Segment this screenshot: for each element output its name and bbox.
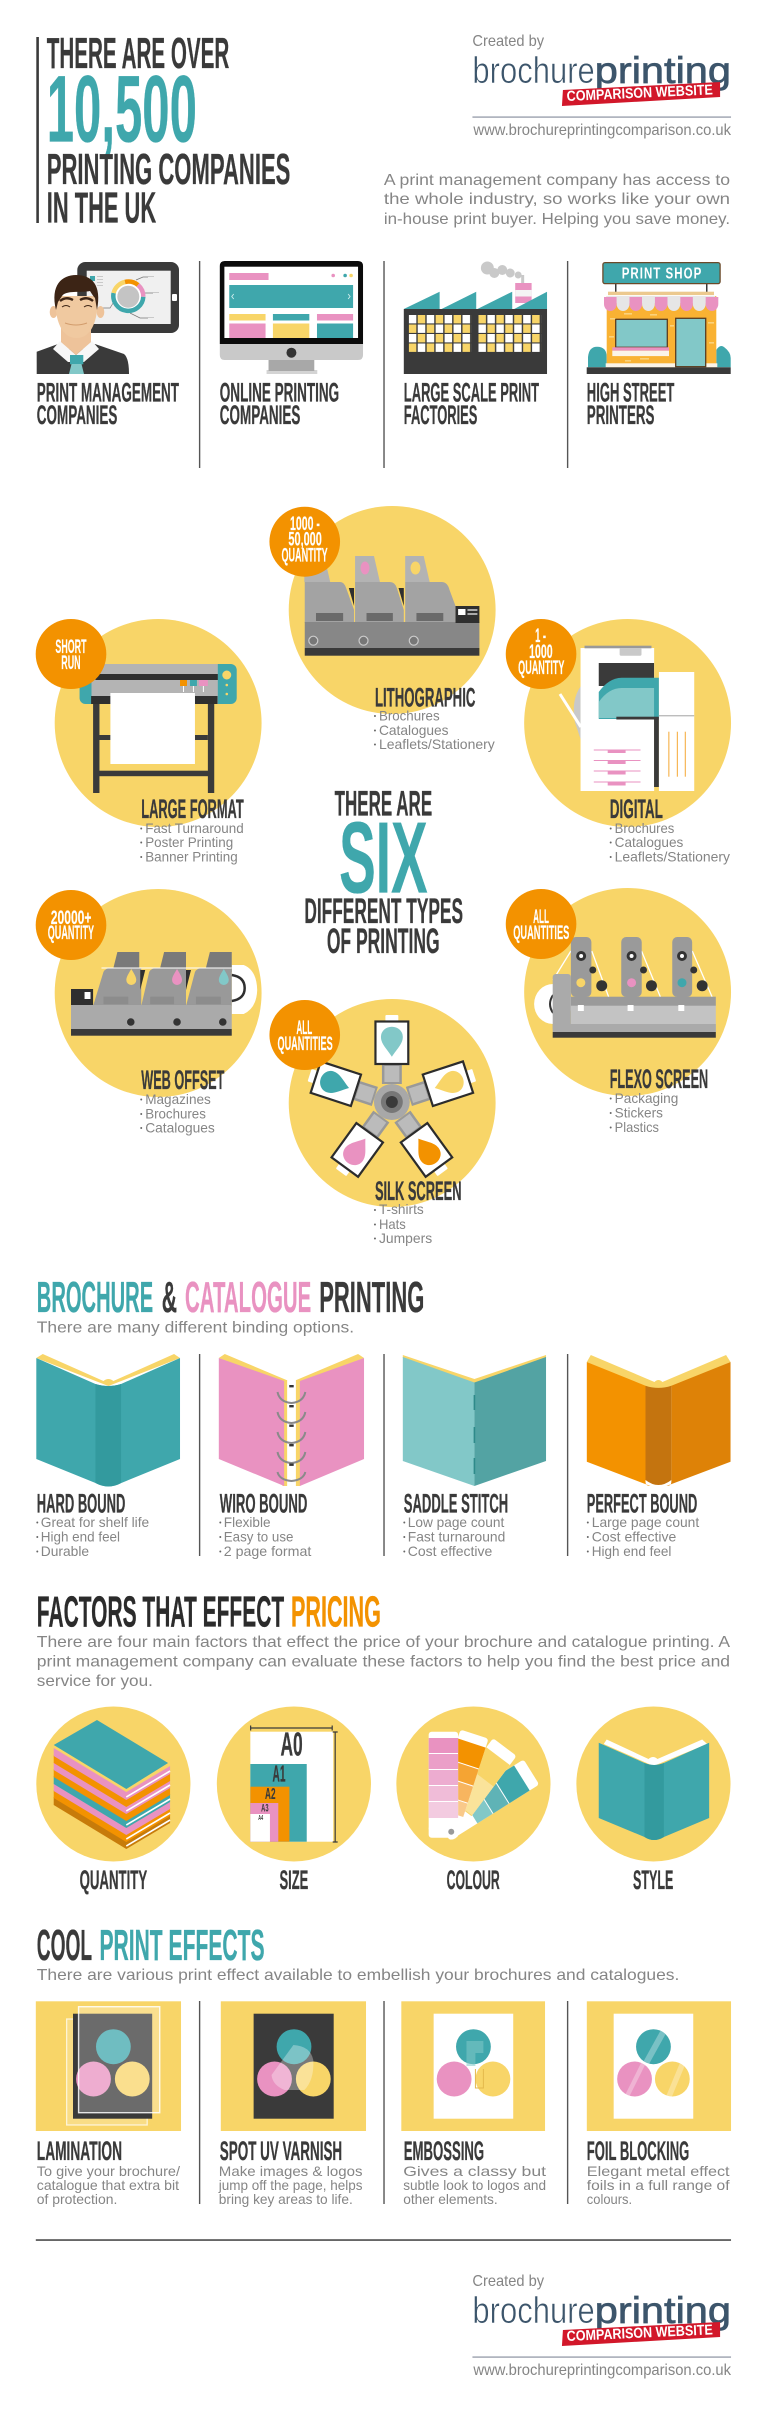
label and text	[37, 2136, 180, 2207]
panel: print management companies	[37, 262, 179, 430]
label and text	[403, 2136, 546, 2207]
panel: spot uv varnish	[218, 2001, 366, 2207]
icon: man with tablet	[37, 262, 179, 374]
label and list	[403, 1489, 508, 1559]
header: vertical rule and headline: THERE ARE OVER	[47, 30, 229, 78]
label and text: Make images & logos	[219, 2163, 363, 2179]
heading: PRINTERS	[587, 400, 654, 430]
label and text	[587, 2136, 730, 2207]
label and list: Stickers	[615, 1105, 663, 1121]
run-length badge: SHORT	[55, 637, 87, 658]
label and text: subtle look to logos and	[403, 2177, 546, 2193]
logo: footer: www.brochureprintingcomparison.co.uk	[472, 2362, 731, 2379]
panel: colour	[396, 1706, 551, 1895]
heading	[404, 377, 539, 430]
label and list: Packaging	[615, 1090, 678, 1106]
label and list: Jumpers	[379, 1230, 432, 1246]
label and list	[219, 1489, 311, 1559]
panel: online printing companies	[220, 261, 363, 430]
label and list: Banner Printing	[145, 849, 238, 865]
label and list	[587, 1489, 699, 1559]
heading	[220, 377, 339, 430]
logo: footer: brochure	[472, 2290, 595, 2331]
label and list: Catalogues	[145, 1120, 215, 1136]
quantity badge: 1000 -	[290, 514, 320, 535]
heading: ONLINE PRINTING	[220, 377, 339, 408]
icon: spot uv sheet	[221, 2001, 366, 2131]
subheading: print effects intro: There are various print effect available to embellish your brochures and catalogues.	[37, 1967, 679, 1984]
quantity badge: 1 -	[535, 626, 546, 647]
label and list: Catalogues	[615, 834, 683, 850]
heading: brochure and catalogue printing: BROCHURE	[37, 1274, 153, 1322]
icon: desktop monitor	[220, 261, 363, 374]
label and list: Plastics	[615, 1119, 659, 1135]
label and text: foils in a full range of	[587, 2177, 730, 2193]
intro paragraph: A print management company has access to	[384, 172, 730, 189]
header: vertical rule and headline: 10,500	[47, 56, 197, 163]
icon: stack of books	[54, 1720, 170, 1849]
label and list: Durable	[41, 1543, 89, 1559]
icon: lithographic press	[304, 556, 479, 656]
heading: FACTORIES	[404, 400, 477, 430]
label and text: bring key areas to life.	[219, 2191, 353, 2207]
label and list: Leaflets/Stationery	[615, 849, 730, 865]
icon: colour swatch fan	[428, 1730, 539, 1841]
icon: foil sheet	[587, 2001, 731, 2131]
panel: lamination	[36, 2001, 181, 2207]
icon: perfect bound book	[587, 1355, 731, 1486]
label and text: jump off the page, helps	[218, 2177, 363, 2193]
panel: saddle stitch: SADDLE STITCH	[404, 1489, 508, 1519]
logo: footer: printing	[595, 2290, 731, 2331]
logo: top	[472, 33, 731, 139]
heading	[37, 377, 179, 430]
column dividers: binding	[199, 1354, 568, 1556]
quantity badge	[269, 507, 340, 577]
panel: quantity: QUANTITY	[80, 1865, 147, 1895]
panel: digital	[506, 619, 731, 865]
quantity badge	[36, 890, 106, 960]
heading: COMPANIES	[37, 400, 117, 430]
quantity badge: QUANTITY	[281, 546, 328, 567]
intro paragraph: the whole industry, so works like your own	[384, 191, 730, 208]
label and text: SPOT UV VARNISH	[220, 2136, 342, 2166]
panel: perfect bound	[587, 1355, 731, 1559]
label and list	[610, 1064, 708, 1135]
panel: size: SIZE	[279, 1865, 308, 1895]
panel: quantity	[36, 1706, 190, 1895]
text block: pricing factors intro	[37, 1634, 730, 1690]
panel: large format	[36, 619, 262, 865]
label and list: T-shirts	[379, 1201, 424, 1217]
run-length badge	[36, 619, 106, 689]
label and text: EMBOSSING	[404, 2136, 484, 2166]
label and text: other elements.	[403, 2191, 498, 2207]
label and list: Catalogues	[379, 722, 449, 738]
heading: brochure and catalogue printing: CATALOGUE	[185, 1274, 311, 1322]
label and list	[374, 1176, 461, 1246]
quantity badge: QUANTITIES	[513, 923, 569, 944]
label and list: Cost effective	[408, 1543, 493, 1559]
label and list: High end feel	[592, 1543, 671, 1559]
quantity badge: ALL	[296, 1018, 312, 1039]
logo: top: printing	[595, 50, 731, 91]
label and list: WIRO BOUND	[220, 1489, 307, 1519]
icon: saddle stitch book	[403, 1355, 546, 1486]
center heading: six types of printing: OF PRINTING	[327, 922, 440, 961]
header: vertical rule and headline	[36, 30, 290, 233]
center heading: six types of printing: THERE ARE	[335, 785, 432, 824]
icon: embossed sheet	[401, 2001, 545, 2131]
logo: top: brochure	[472, 50, 595, 91]
icon: paper sizes: A1	[273, 1761, 286, 1787]
intro paragraph: in-house print buyer. Helping you save money.	[384, 211, 730, 228]
panel: large scale print factories: LARGE SCALE PRINT	[404, 377, 539, 408]
center heading: six types of printing: SIX	[339, 802, 428, 915]
label and list: Low page count	[408, 1514, 504, 1530]
label and list: Poster Printing	[145, 834, 233, 850]
label and list	[36, 1489, 149, 1559]
panel: lithographic	[269, 506, 496, 752]
infographic canvas: PRINT EFFECTS	[99, 1922, 265, 1970]
heading: brochure and catalogue printing: &	[162, 1274, 177, 1322]
panel: web offset	[36, 889, 262, 1136]
heading: factors that effect pricing: FACTORS THAT EFFECT	[37, 1589, 284, 1637]
icon: wiro bound book	[219, 1354, 364, 1486]
label and text: catalogue that extra bit	[37, 2177, 179, 2193]
panel: high street printers: HIGH STREET	[587, 377, 675, 408]
label and list: Cost effective	[592, 1529, 677, 1545]
infographic canvas: PRICING	[291, 1589, 381, 1637]
logo: footer: Created by	[472, 2273, 544, 2290]
label and list: Brochures	[379, 708, 440, 724]
label and list: Flexible	[224, 1514, 271, 1530]
panel: size	[217, 1706, 371, 1895]
text block: pricing factors intro: print management company can evaluate these factors to help you find the best price and	[37, 1654, 730, 1671]
label and list: LITHOGRAPHIC	[375, 683, 475, 713]
quantity badge: QUANTITY	[518, 658, 565, 679]
quantity badge: QUANTITIES	[277, 1034, 333, 1055]
quantity badge: ALL	[533, 907, 549, 928]
panel: large format: LARGE FORMAT	[141, 794, 244, 824]
panel: high street printers	[587, 263, 731, 430]
logo: top: Created by	[472, 33, 544, 50]
label and text: colours.	[587, 2191, 632, 2207]
icon: paper sizes: A4	[258, 1813, 264, 1822]
quantity badge	[506, 619, 576, 689]
quantity badge: 1000	[529, 642, 553, 663]
quantity badge: 50,000	[288, 530, 322, 551]
run-length badge: RUN	[61, 653, 81, 674]
header: vertical rule and headline: IN THE UK	[47, 184, 156, 233]
heading: COMPANIES	[220, 400, 300, 430]
logo: top: www.brochureprintingcomparison.co.uk	[472, 122, 731, 139]
label and text	[218, 2136, 363, 2207]
icon: paper sizes	[250, 1726, 338, 1842]
quantity badge: QUANTITY	[48, 923, 94, 944]
logo: footer	[472, 2273, 731, 2379]
heading	[587, 377, 675, 430]
panel: silk screen	[269, 999, 496, 1246]
icon: print shop	[587, 263, 731, 374]
icon: paper sizes: A2	[265, 1786, 276, 1803]
label and text: of protection.	[37, 2191, 117, 2207]
label and text: Gives a classy but	[403, 2163, 546, 2179]
column dividers: company types	[199, 261, 568, 468]
panel: colour: COLOUR	[447, 1865, 500, 1895]
label and list	[140, 1065, 225, 1136]
header: vertical rule and headline: PRINTING COMPANIES	[47, 146, 290, 194]
icon: teal book	[599, 1740, 709, 1840]
heading: brochure and catalogue printing	[37, 1274, 424, 1322]
panel: wiro bound	[219, 1354, 364, 1559]
label and list: Magazines	[145, 1091, 211, 1107]
quantity badge	[506, 889, 576, 959]
footer rule	[36, 2239, 731, 2241]
label and list	[374, 683, 495, 752]
icon: laminated sheet	[36, 2001, 181, 2131]
label and list: Leaflets/Stationery	[379, 736, 495, 752]
label and list	[610, 794, 730, 865]
icon: paper sizes: A3	[261, 1803, 269, 1815]
icon: screen printing carousel	[305, 1015, 479, 1182]
icon: factory	[404, 262, 547, 374]
label and list: Large page count	[592, 1514, 699, 1530]
panel: embossing	[401, 2001, 546, 2207]
subheading: binding options: There are many different binding options.	[37, 1320, 354, 1337]
text block: pricing factors intro: service for you.	[37, 1673, 153, 1690]
label and list: HARD BOUND	[37, 1489, 125, 1519]
column dividers: effects	[199, 2001, 568, 2204]
intro paragraph	[384, 172, 730, 228]
icon: large format printer	[80, 664, 237, 793]
icon: print shop: PRINT SHOP	[622, 264, 701, 282]
heading: factors that effect pricing	[37, 1589, 381, 1637]
icon: flexo press	[534, 937, 716, 1038]
logo: top: COMPARISON WEBSITE	[566, 82, 713, 105]
label and list: Hats	[379, 1216, 406, 1232]
heading: cool print effects	[37, 1922, 265, 1970]
label and list	[140, 794, 244, 865]
quantity badge: 20000+	[51, 908, 92, 929]
panel: style	[576, 1706, 731, 1895]
quantity badge	[269, 1000, 340, 1070]
icon: web offset press	[71, 952, 257, 1036]
label and text: To give your brochure/	[37, 2163, 180, 2179]
text block: pricing factors intro: There are four main factors that effect the price of your brochure and catalogue printing. A	[37, 1634, 730, 1651]
panel: large scale print factories	[404, 262, 547, 430]
infographic canvas: DIFFERENT TYPES	[304, 892, 463, 931]
icon: paper sizes: A0	[280, 1726, 303, 1763]
panel: saddle stitch	[403, 1355, 546, 1559]
panel: hard bound	[36, 1354, 180, 1559]
label and list: Great for shelf life	[41, 1514, 149, 1530]
heading: cool print effects: COOL	[37, 1922, 92, 1970]
label and list: Easy to use	[224, 1529, 294, 1545]
panel: silk screen: SILK SCREEN	[375, 1176, 461, 1206]
label and text: LAMINATION	[37, 2136, 122, 2166]
center heading: six types of printing	[304, 785, 463, 961]
label and list: Fast turnaround	[408, 1529, 505, 1545]
panel: style: STYLE	[633, 1865, 673, 1895]
label and list: High end feel	[41, 1529, 120, 1545]
heading: PRINT MANAGEMENT	[37, 377, 179, 408]
label and text: Elegant metal effect	[587, 2163, 730, 2179]
label and list: Brochures	[615, 820, 674, 836]
label and list: Brochures	[145, 1106, 206, 1122]
logo: footer: COMPARISON WEBSITE	[566, 2322, 713, 2345]
label and list: DIGITAL	[610, 794, 663, 824]
label and list: 2 page format	[224, 1543, 311, 1559]
heading: brochure and catalogue printing: PRINTING	[319, 1274, 424, 1322]
panel: web offset: WEB OFFSET	[141, 1065, 225, 1095]
label and list: Fast Turnaround	[145, 820, 244, 836]
panel: flexo screen	[506, 888, 731, 1135]
icon: digital press	[560, 646, 694, 791]
panel: foil blocking	[587, 2001, 731, 2207]
icon: hard bound book	[36, 1354, 180, 1486]
